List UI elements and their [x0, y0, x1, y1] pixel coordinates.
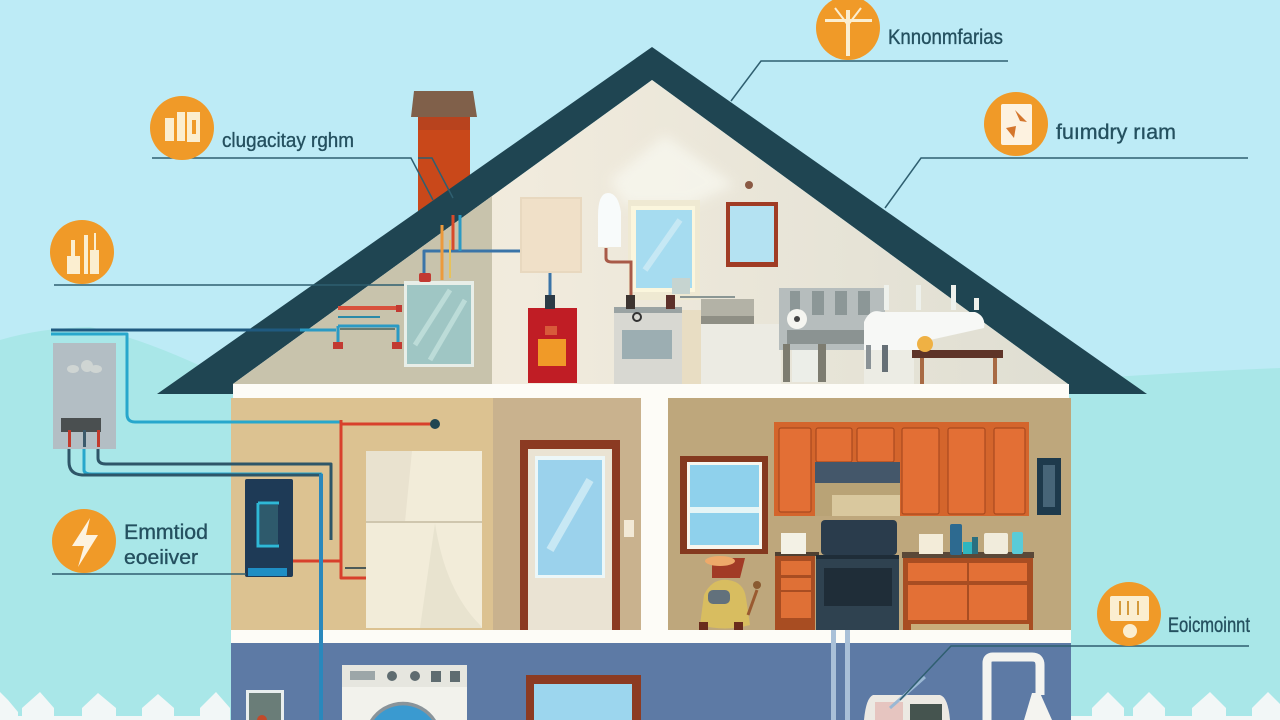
right room wall [668, 398, 1071, 630]
orange icon [52, 509, 116, 573]
callout: utility line [50, 220, 404, 285]
label: Eoicmoinnt [1168, 614, 1250, 637]
refrigerator [366, 451, 482, 628]
wall boiler [598, 193, 631, 295]
attic window [628, 200, 700, 300]
wall thermostat panel [1037, 458, 1061, 515]
smoke detector [745, 181, 753, 189]
basement small panel [246, 690, 284, 720]
pipe valves [333, 273, 431, 349]
attic bed [864, 285, 984, 384]
ground floor [231, 398, 1071, 630]
small framed window [726, 202, 778, 267]
attic stove [614, 278, 735, 384]
counter right [902, 552, 1034, 630]
attic floor [233, 80, 1069, 398]
middle room wall [493, 398, 641, 630]
attic walls [233, 80, 1068, 384]
leader line [54, 284, 404, 286]
leader line [900, 646, 1249, 700]
picket fence right [1070, 692, 1280, 720]
leader line [731, 61, 1008, 101]
stove [816, 520, 899, 630]
light switch [624, 520, 634, 537]
red water heater [528, 295, 577, 383]
center wall [641, 398, 668, 630]
leader line [52, 573, 246, 575]
wire end node [430, 419, 440, 429]
attic floor slab [233, 384, 1069, 398]
basement window [526, 675, 641, 720]
orange icon [50, 220, 114, 284]
attic wall panel [521, 198, 581, 272]
attic tank [404, 281, 474, 367]
label: Knnonmfarias [888, 26, 1003, 49]
attic sky light [610, 135, 735, 205]
label: fuımdry rıam [1056, 121, 1176, 144]
basement vertical pipes [831, 630, 850, 720]
callout: emergency receiver: eoeiiver [124, 547, 198, 569]
callout: laundry room [885, 92, 1248, 208]
attic table [912, 336, 1003, 384]
orange icon [816, 0, 880, 60]
basement [231, 630, 1071, 720]
kitchen upper cabinets [774, 422, 1029, 516]
left room wall [231, 398, 493, 630]
electrical panel [245, 479, 293, 577]
left attic section [233, 196, 492, 384]
basement appliance [864, 677, 950, 720]
kitchen window [680, 456, 768, 554]
counter items [781, 524, 1023, 555]
chimney [411, 91, 477, 215]
kitchen robot vacuum [699, 556, 761, 630]
label: Emmtiod [124, 521, 208, 544]
callout: emergency receiver [52, 509, 246, 574]
door [520, 440, 620, 630]
basement pipe loop [987, 657, 1052, 720]
callout: connections [731, 0, 1008, 101]
kitchen counter left [775, 552, 819, 630]
picket fence left [0, 692, 230, 720]
attic pipes [250, 215, 550, 345]
orange icon [150, 96, 214, 160]
floor slab [231, 630, 1071, 643]
orange icon [984, 92, 1048, 156]
label: clugacitay rghm [222, 130, 354, 152]
washing machine [342, 665, 467, 720]
leader line [885, 158, 1248, 208]
callout: basement [900, 582, 1250, 700]
wires from meter [51, 330, 435, 720]
attic wall unit [701, 299, 781, 384]
electric meter box [53, 343, 116, 449]
attic bunk [779, 288, 885, 382]
basement wall [231, 643, 1071, 720]
roof [157, 47, 1147, 394]
leader line [152, 158, 453, 200]
callout: electricity room [150, 96, 453, 200]
range hood [815, 462, 900, 516]
orange icon [1097, 582, 1161, 646]
